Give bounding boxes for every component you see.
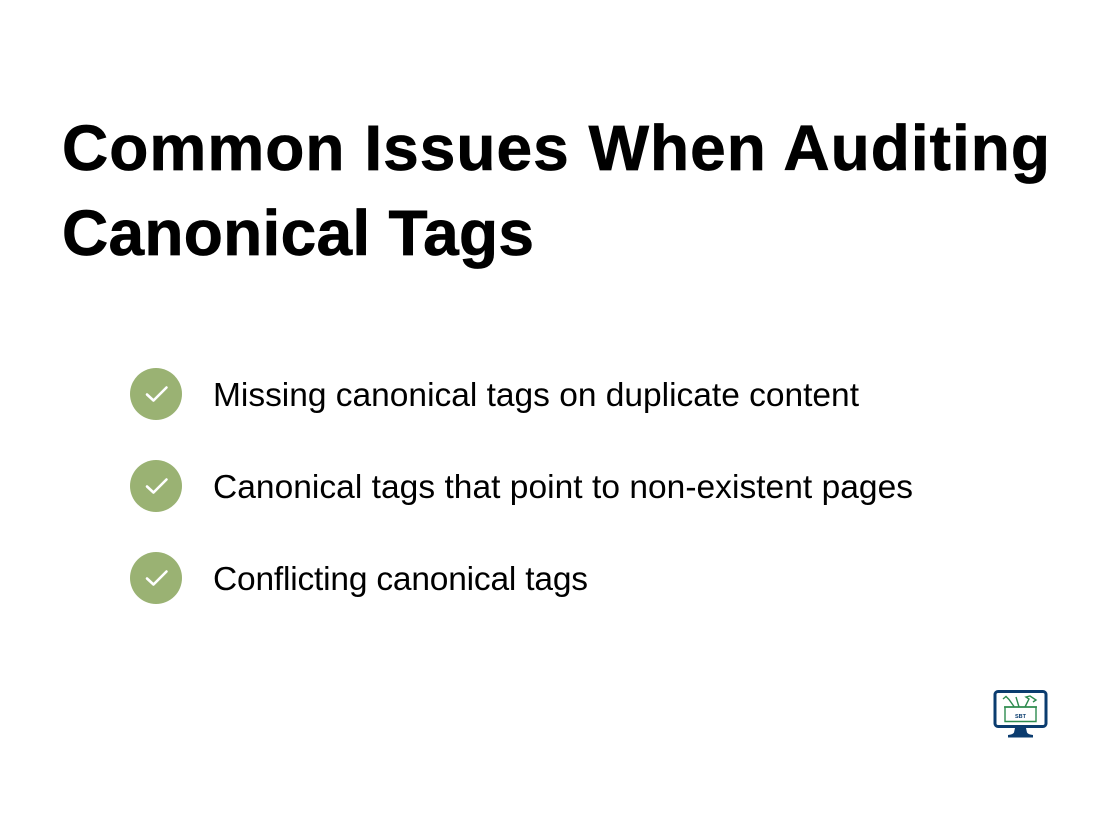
item text: Missing canonical tags on duplicate content — [213, 377, 860, 414]
item: conflicting tags — [130, 552, 588, 604]
icon: check badge — [130, 460, 182, 512]
checklist — [130, 368, 913, 604]
item text: Canonical tags that point to non-existent pages — [213, 469, 913, 506]
item: non-existent pages — [130, 460, 913, 512]
title: Common Issues When Auditing — [62, 112, 1050, 184]
title — [62, 112, 1050, 269]
item text: Conflicting canonical tags — [213, 561, 588, 598]
title: Canonical Tags — [62, 197, 534, 269]
icon: check badge — [130, 552, 182, 604]
icon: check badge — [130, 368, 182, 420]
logo: monitor with toolbox — [995, 692, 1046, 738]
item: missing canonical tags — [130, 368, 860, 420]
logo: monitor with toolbox: SBT — [1015, 714, 1027, 720]
